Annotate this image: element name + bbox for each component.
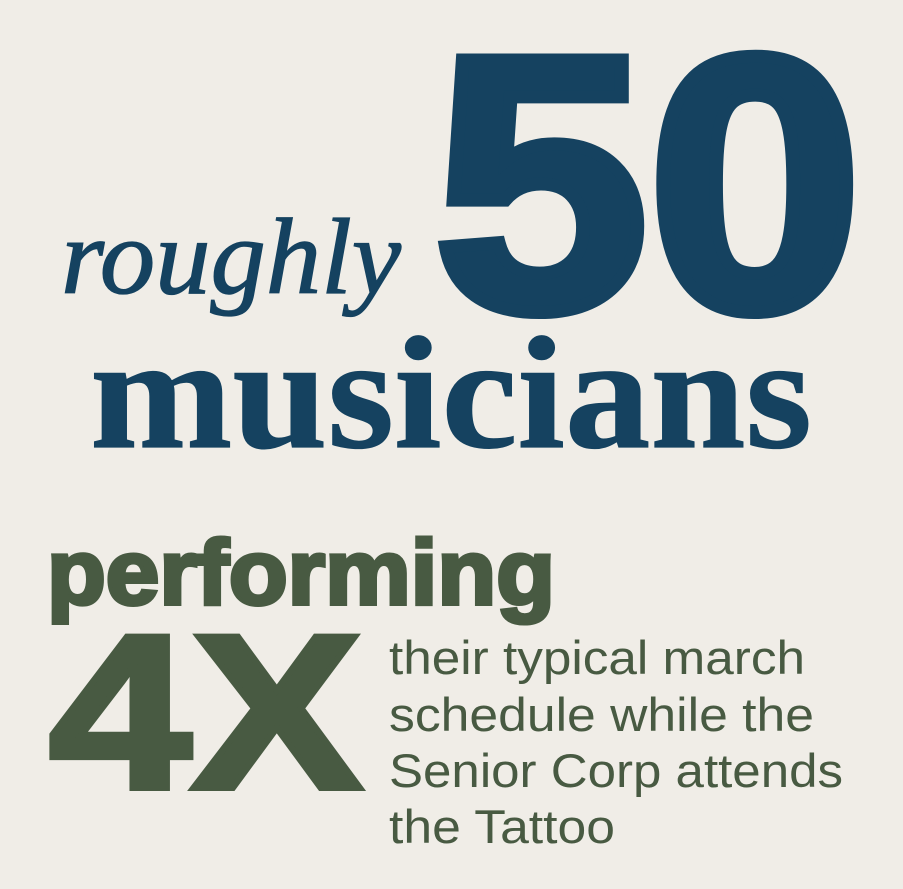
text block: schedule description [389,631,843,853]
text block: schedule description: schedule while the [389,688,814,741]
number: 4X: 4X [49,589,362,835]
text: roughly: roughly [61,198,401,317]
text block: schedule description: their typical march [389,631,805,684]
text: performing: performing [47,522,555,624]
text: musicians: musicians [90,304,812,482]
text block: schedule description: Senior Corp attends [389,744,843,797]
text block: schedule description: the Tattoo [389,800,615,853]
